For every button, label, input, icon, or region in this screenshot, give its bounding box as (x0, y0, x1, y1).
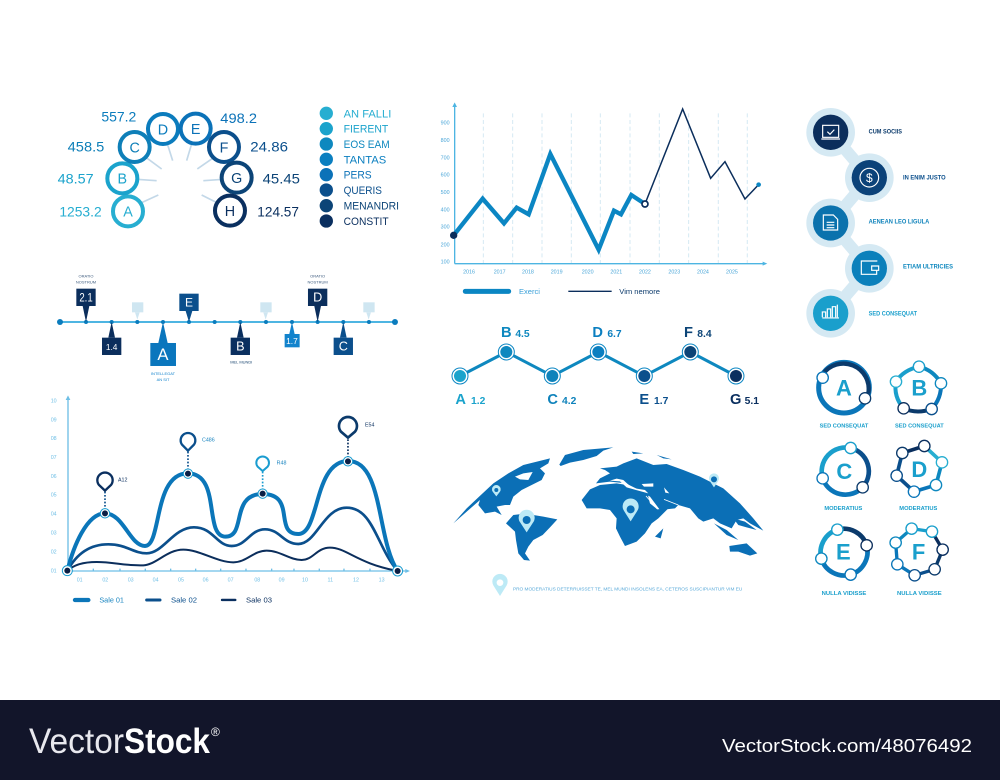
badge E (816, 524, 872, 580)
panel: timeline: C (339, 340, 348, 354)
panel: radial value rings: 124.57 (257, 204, 299, 220)
chart: yearly line: 2025 (726, 269, 738, 275)
badge B: B (911, 376, 927, 401)
chart: sales curves: 01 (77, 577, 83, 583)
south america (506, 514, 557, 561)
panel: timeline: A (157, 345, 169, 364)
panel: icon stack: ETIAM ULTRICIES (903, 263, 953, 270)
badge A (817, 362, 871, 413)
legend: sales (75, 595, 272, 604)
badge captions (820, 424, 944, 597)
panel: timeline: 1.4 (106, 342, 118, 352)
footer banner: VectorStock.com/48076492 (722, 736, 972, 756)
chart: yearly line: 2017 (494, 269, 506, 275)
panel: radial value rings: 498.2 (220, 110, 257, 126)
chart: zigzag points: 5.1 (745, 396, 759, 407)
panel: radial value rings: B (118, 172, 127, 188)
chart: zigzag points: D (592, 325, 603, 341)
chart: zigzag points: 6.7 (607, 329, 622, 340)
panel: icon stack (806, 108, 953, 338)
chart: zigzag points: 4.5 (515, 329, 530, 340)
legend: radial categories: TANTAS (344, 154, 387, 166)
icon: laptop (813, 115, 848, 150)
chart: yearly line: 100 (441, 260, 450, 266)
pin: south america (519, 510, 535, 532)
ring D (148, 114, 178, 144)
badge A: A (836, 376, 852, 401)
flag 1.4 (102, 322, 121, 355)
panel: radial value rings: 458.5 (68, 139, 105, 155)
chart: sales curves: 10 (302, 577, 308, 583)
chart: sales curves: 05 (178, 577, 184, 583)
panel: timeline: 2.1 (79, 291, 93, 305)
legend: radial categories (320, 107, 399, 228)
panel: radial value rings (58, 109, 300, 226)
ring B (107, 163, 137, 193)
pin: E54: E54 (365, 423, 374, 429)
badge captions: NULLA VIDISSE (897, 591, 942, 597)
panel: radial value rings: 24.86 (250, 139, 288, 155)
chart: yearly line: 600 (441, 173, 450, 179)
panel: ring badges (816, 361, 948, 597)
footer banner (0, 700, 1000, 780)
chart: yearly line: 2023 (668, 269, 680, 275)
line: exerci (454, 154, 645, 250)
line: sale 01 (67, 461, 398, 571)
chart: yearly line: 2016 (463, 269, 475, 275)
legend: radial categories: QUERIS (344, 185, 382, 197)
panel: timeline: B (236, 340, 245, 354)
panel: icon stack: IN ENIM JUSTO (903, 175, 946, 182)
caption: map: PRO MODERATIUS DETERRUISSET TE, MEL MUNDI INSOLENS EA, CETEROS SUSCIPIANTUR VIM EU (513, 587, 743, 593)
chart: sales curves: 10 (51, 398, 57, 404)
eurasia (596, 458, 763, 531)
chart: sales curves: 02 (51, 549, 57, 555)
chart: sales curves: 04 (51, 512, 57, 518)
badge D: D (911, 457, 927, 482)
chart: sales curves: 08 (254, 577, 260, 583)
chart: zigzag points: F (684, 325, 693, 341)
legend: line chart (465, 287, 660, 296)
legend: radial categories: PERS (344, 170, 372, 182)
ring G (222, 163, 252, 193)
chart: zigzag points: E (639, 392, 649, 408)
caption: map (492, 574, 743, 596)
panel: timeline: E (185, 296, 193, 310)
icon: dollar: $ (866, 171, 873, 185)
islands (632, 452, 757, 540)
legend: radial categories: AN FALLI (344, 108, 391, 120)
panel: timeline: NOSTRUM (308, 279, 328, 284)
flag 1.7 (285, 322, 300, 347)
legend: radial categories: EOS EAM (344, 139, 390, 151)
chart: yearly line: 2022 (639, 269, 651, 275)
pin: africa (623, 498, 639, 521)
chart: yearly line: 300 (441, 225, 450, 231)
flag pale 2 (260, 302, 272, 320)
icon: wallet (852, 251, 887, 286)
panel: radial value rings: E (191, 122, 200, 138)
panel: radial value rings: 557.2 (101, 109, 137, 125)
badge captions: NULLA VIDISSE (822, 591, 867, 597)
panel: timeline: ORATIO (310, 274, 325, 279)
line: sale 02 (67, 508, 398, 571)
legend: line chart: Exerci (519, 287, 540, 296)
panel: radial value rings: C (129, 140, 140, 156)
chart: sales curves: 03 (51, 530, 57, 536)
badge C (817, 442, 869, 495)
chart: yearly line: 400 (441, 207, 450, 213)
panel: radial value rings: F (220, 140, 229, 156)
badge C: C (836, 459, 852, 484)
chart: sales curves: 04 (153, 577, 159, 583)
chart: zigzag points (452, 325, 759, 408)
badge E: E (836, 540, 851, 565)
badge captions: SED CONSEQUAT (895, 424, 944, 430)
line: sale 03 (67, 548, 398, 571)
chart: yearly line: 900 (441, 121, 450, 127)
legend: radial categories: CONSTIT (344, 216, 389, 228)
chart: sales curves: 05 (51, 493, 57, 499)
ring C (120, 132, 150, 162)
panel: radial value rings: H (225, 204, 235, 220)
panel: timeline: MEL MUNDI (230, 360, 252, 365)
map: world (453, 447, 763, 596)
chart: yearly line: 2024 (697, 269, 709, 275)
badge captions: SED CONSEQUAT (820, 424, 869, 430)
chart: sales curves: 08 (51, 436, 57, 442)
chart: sales curves: 03 (128, 577, 134, 583)
chart: yearly line: 2020 (582, 269, 594, 275)
pin: north america (492, 485, 501, 496)
chart: sales curves: 01 (51, 568, 57, 574)
ring A (113, 196, 143, 226)
badge captions: MODERATIUS (899, 506, 938, 512)
panel: icon stack: AENEAN LEO LIGULA (869, 219, 930, 226)
chart: sales curves: 02 (102, 577, 108, 583)
panel: timeline: 1.7 (286, 336, 298, 346)
chart: yearly line: 200 (441, 242, 450, 248)
ring H (215, 196, 245, 226)
chart: zigzag points: 8.4 (697, 329, 712, 340)
badge F: F (912, 540, 925, 565)
panel: timeline: AN SIT (157, 377, 170, 382)
badge captions: MODERATIUS (824, 506, 863, 512)
chart: sales curves: 07 (228, 577, 234, 583)
chart: zigzag points: G (730, 392, 741, 408)
chart: zigzag points: 4.2 (562, 396, 577, 407)
panel: icon stack: SED CONSEQUAT (869, 311, 917, 318)
pin: A12: A12 (118, 477, 128, 483)
greenland (559, 447, 613, 466)
australia (729, 543, 757, 556)
panel: timeline (57, 274, 398, 382)
chart: sales curves: 12 (353, 577, 359, 583)
panel: radial value rings: 45.45 (263, 171, 300, 187)
flag D (308, 289, 327, 322)
legend: sales: Sale 01 (99, 595, 124, 604)
icon: bars (813, 296, 848, 331)
pin: C486: C486 (202, 437, 215, 443)
chart: zigzag points: A (455, 392, 466, 408)
panel: timeline: D (313, 290, 322, 304)
chart: sales curves: 06 (203, 577, 209, 583)
flag A (150, 322, 176, 366)
flag B (231, 322, 250, 355)
footer banner: Vector (29, 722, 124, 761)
chart: sales curves: 13 (379, 577, 385, 583)
footer banner: Stock (124, 722, 210, 761)
chart: zigzag points: B (501, 325, 512, 341)
legend: radial categories: MENANDRI (344, 201, 399, 213)
icon: document (813, 205, 848, 241)
legend: radial categories: FIERENT (344, 124, 388, 136)
chart: yearly line: 2018 (522, 269, 534, 275)
flag 2.1 (76, 289, 96, 322)
legend: line chart: Vim nemore (619, 287, 660, 296)
badge D (891, 440, 948, 497)
chart: zigzag points: 1.2 (471, 396, 486, 407)
pin: asia (709, 473, 719, 487)
chart: yearly line (441, 102, 767, 296)
chart: sales curves: 09 (279, 577, 285, 583)
chart: zigzag points: 1.7 (654, 396, 669, 407)
panel: radial value rings: D (158, 122, 168, 138)
chart: zigzag points: C (547, 392, 558, 408)
panel: icon stack: CUM SOCIIS (869, 128, 902, 135)
line: vim nemore (645, 109, 759, 204)
chart: sales curves (51, 395, 410, 604)
chart: yearly line: 800 (441, 138, 450, 144)
ring E (181, 114, 211, 144)
badge B (890, 361, 947, 415)
flag pale (132, 302, 143, 320)
pin: E54 (339, 417, 374, 438)
chart: sales curves: 11 (328, 577, 333, 583)
panel: radial value rings: A (123, 205, 133, 221)
chart: yearly line: 500 (441, 190, 450, 196)
chart: sales curves: 06 (51, 474, 57, 480)
north america (453, 458, 550, 523)
chart: yearly line: 2021 (610, 269, 622, 275)
pin: R48: R48 (277, 461, 286, 467)
flag E (179, 294, 199, 322)
chart: sales curves: 07 (51, 455, 57, 461)
badge F (890, 523, 948, 581)
flag C (334, 322, 353, 355)
panel: radial value rings: 1253.2 (59, 204, 102, 220)
legend: sales: Sale 02 (171, 595, 197, 604)
icon: dollar (852, 160, 887, 195)
ring F (209, 132, 239, 162)
pin: C486 (181, 433, 215, 451)
footer banner: ® (211, 725, 220, 739)
chart: sales curves: 09 (51, 417, 57, 423)
panel: radial value rings: 48.57 (58, 171, 94, 187)
panel: timeline: NOSTRUM (76, 279, 96, 284)
pin: A12 (97, 473, 128, 491)
panel: radial value rings: G (231, 171, 242, 187)
chart: yearly line: 2019 (551, 269, 563, 275)
panel: timeline: ORATIO (79, 274, 93, 279)
flag pale 3 (363, 302, 375, 320)
panel: timeline: INTELLEGAT (151, 371, 176, 376)
chart: yearly line: 700 (441, 155, 450, 161)
africa and middle east (582, 483, 668, 546)
legend: sales: Sale 03 (246, 595, 272, 604)
pin: R48 (256, 456, 286, 471)
